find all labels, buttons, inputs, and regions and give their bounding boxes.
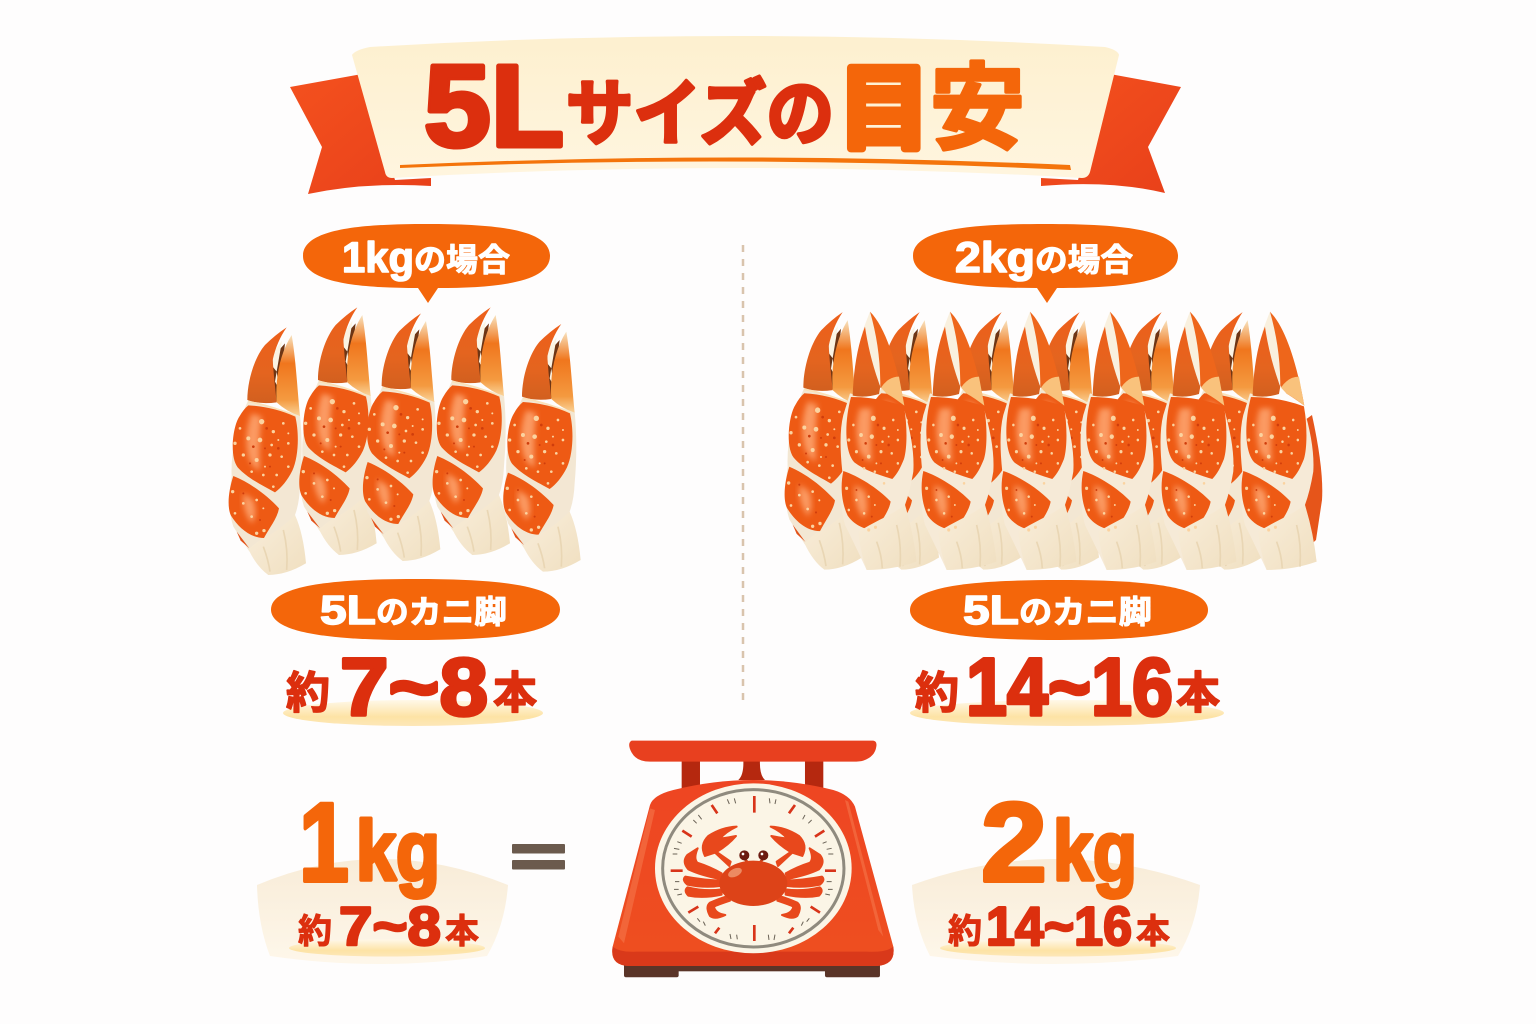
callout: 1kg: の場合 — [414, 242, 510, 278]
crab legs group: 5 pieces — [229, 307, 581, 575]
right panel: 2kg — [785, 224, 1322, 733]
icon: kitchen scale with crab — [612, 741, 894, 977]
left panel: 1kg — [229, 224, 581, 733]
callout: 1kg — [303, 224, 550, 303]
2kg label: 2 — [981, 780, 1047, 905]
count: about 7-8: 本 — [493, 669, 537, 718]
bowl — [912, 859, 1200, 964]
pill: 5L crab legs: のカニ脚 — [376, 594, 507, 630]
count: about 14-16: 本 — [1176, 669, 1220, 718]
pill: 5L crab legs: のカニ脚 — [1019, 594, 1152, 630]
scale posts — [682, 760, 823, 790]
pill: 5L crab legs — [271, 579, 560, 640]
crab legs group: two rows — [785, 312, 1322, 570]
count: about 7-8: 約 — [286, 669, 330, 718]
banner plate — [352, 36, 1119, 178]
count — [289, 895, 485, 957]
crab — [684, 827, 823, 918]
title underline — [400, 158, 1071, 170]
callout: 2kg — [913, 224, 1178, 303]
dial — [655, 783, 852, 953]
scale platform — [629, 741, 877, 762]
count: 約 — [298, 913, 332, 951]
title text: 安: 安 — [930, 56, 1025, 161]
1kg label: kg — [356, 804, 440, 898]
title banner — [290, 36, 1181, 194]
pill: 5L crab legs — [910, 580, 1208, 640]
summary: 1kg — [257, 780, 508, 964]
count: 7~8 — [339, 895, 441, 957]
count: 本 — [445, 913, 479, 951]
equals sign — [512, 844, 565, 870]
count: about 14-16: 約 — [915, 669, 959, 718]
scale body — [612, 780, 894, 966]
pill: 5L crab legs: 5L — [963, 587, 1019, 633]
ribbon left — [290, 74, 431, 194]
1kg label — [299, 780, 440, 905]
count: about 7-8 — [283, 642, 543, 733]
center dashed divider — [742, 245, 744, 705]
ribbon right — [1041, 74, 1181, 193]
callout: 1kg: 1kg — [342, 234, 414, 282]
callout: 2kg: の場合 — [1035, 242, 1133, 278]
count — [940, 895, 1176, 957]
count: about 14-16: 14~16 — [966, 642, 1173, 733]
1kg label: 1 — [299, 780, 349, 905]
count: 本 — [1136, 913, 1170, 951]
bowl — [257, 859, 508, 964]
scale feet — [624, 962, 880, 977]
title text: 目: 目 — [838, 59, 930, 161]
title text: サイズの: サイズの — [566, 75, 834, 155]
count: about 7-8: 7~8 — [340, 642, 488, 733]
2kg label — [981, 780, 1137, 905]
callout: 2kg: 2kg — [955, 234, 1035, 282]
2kg label: kg — [1053, 804, 1137, 898]
count: 14~16 — [986, 895, 1132, 957]
title text: 5L: 5L — [424, 41, 564, 171]
summary: 2kg — [912, 780, 1200, 964]
count: 約 — [948, 913, 982, 951]
pill: 5L crab legs: 5L — [320, 587, 376, 633]
